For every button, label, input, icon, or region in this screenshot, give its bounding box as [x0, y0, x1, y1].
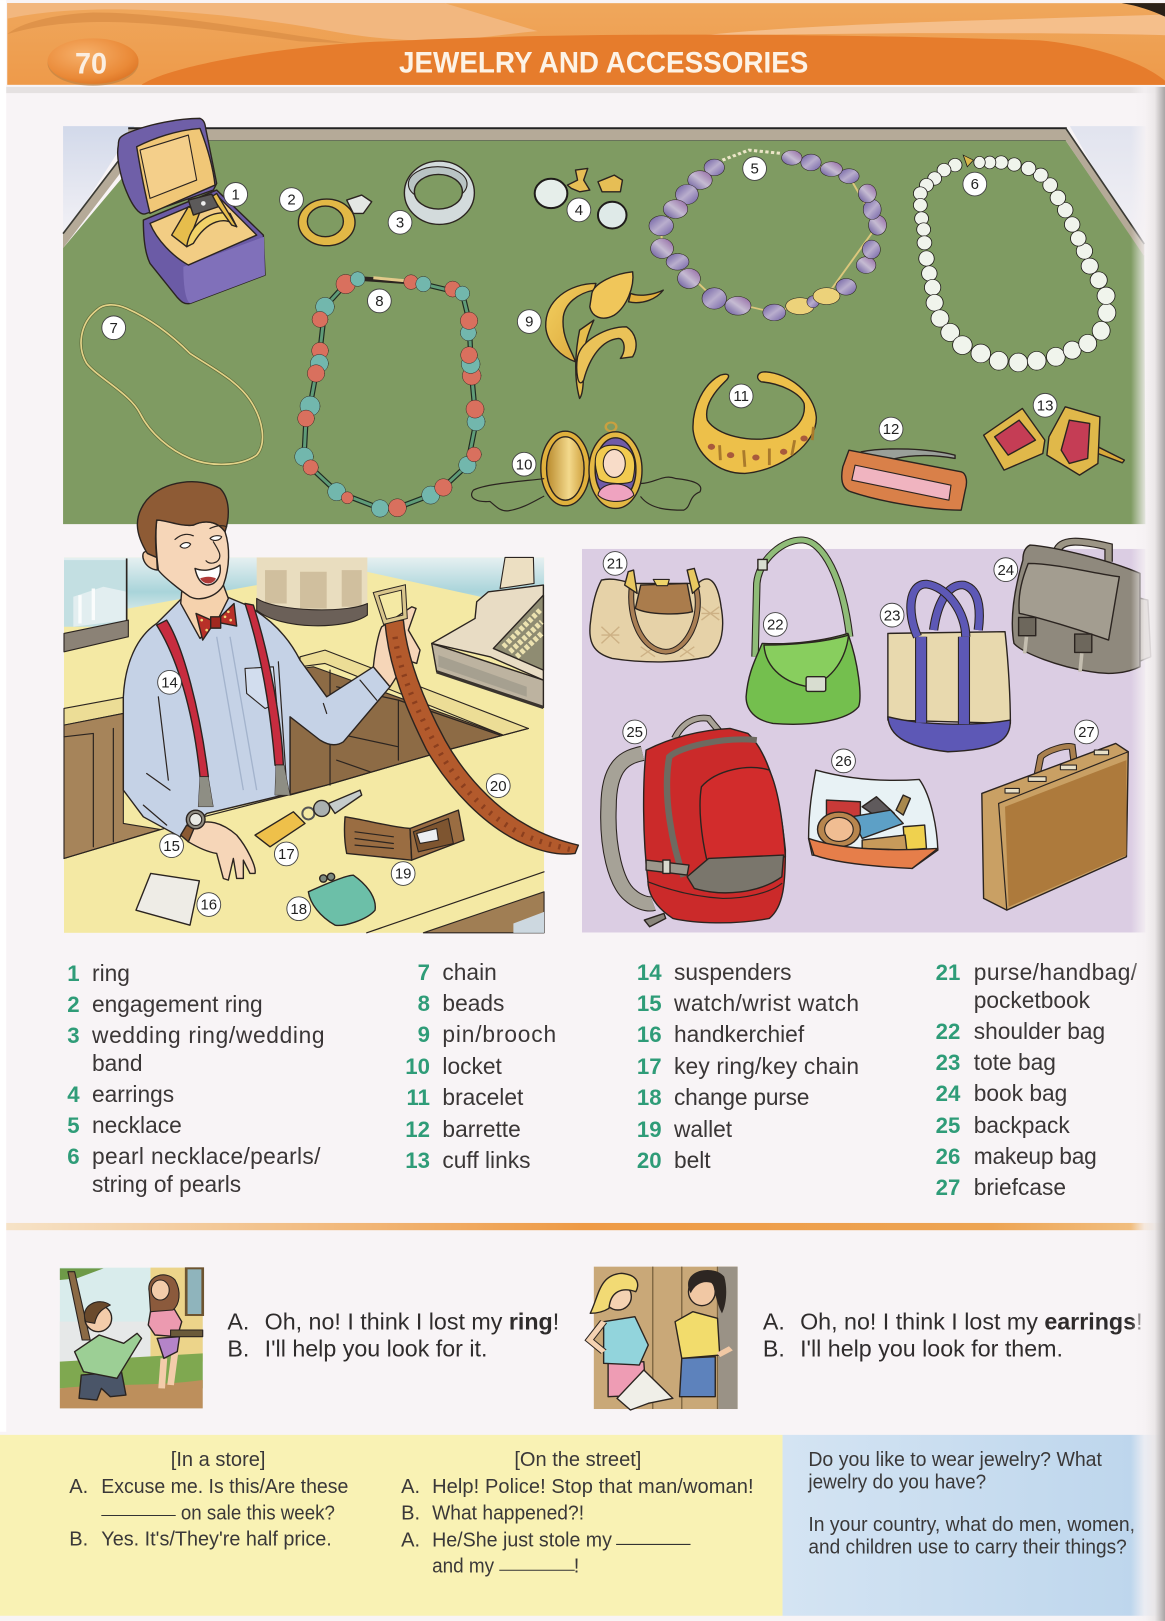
- dialogue 1: [227, 1308, 559, 1361]
- vocabulary column 4: [936, 959, 1138, 1200]
- head: [156, 520, 229, 599]
- vocabulary column 4: backpack: [974, 1112, 1070, 1138]
- number labels on illustrations: 17: [278, 846, 295, 863]
- panel: store counter scene: [64, 557, 544, 933]
- vocabulary column 3: key ring/key chain: [674, 1053, 859, 1079]
- left jewelry items: [81, 118, 485, 517]
- number labels on illustrations: 22: [767, 617, 784, 634]
- number labels on illustrations: 23: [884, 607, 900, 624]
- vocabulary column 4: 22: [936, 1019, 960, 1044]
- in a store dialogue: A.: [69, 1476, 88, 1498]
- raised hand: [373, 607, 420, 687]
- item: pearl necklace: [913, 155, 1116, 372]
- key ring: [255, 790, 362, 847]
- number labels on illustrations: 24: [997, 562, 1014, 579]
- number labels on illustrations: 11: [733, 388, 749, 405]
- vocabulary column 3: [637, 959, 859, 1173]
- cash register: [432, 557, 543, 707]
- vocabulary column 1: wedding ring/wedding: [91, 1022, 325, 1048]
- on the street dialogue: and my: [432, 1555, 494, 1577]
- background wall: [64, 557, 544, 620]
- number labels on illustrations: 9: [525, 314, 533, 331]
- number labels on illustrations: 26: [835, 753, 852, 770]
- counter opening cabinets: [290, 667, 503, 795]
- item: barrette: [842, 449, 966, 510]
- vocabulary column 2: 8: [418, 991, 430, 1016]
- face details: [175, 526, 227, 585]
- vocabulary column 1: earrings: [92, 1081, 174, 1107]
- item: locket cord left: [472, 479, 544, 511]
- vocabulary column 2: 12: [405, 1117, 430, 1142]
- pillar: [257, 557, 367, 626]
- vocabulary column 3: belt: [674, 1147, 711, 1173]
- panel: bags: [582, 540, 1151, 932]
- vocabulary column 1: engagement ring: [92, 991, 263, 1017]
- wrist watch: [181, 810, 205, 842]
- item: chain: [81, 305, 263, 464]
- item: purse: [590, 568, 723, 662]
- in a store dialogue: Yes. It's/They're half price.: [101, 1528, 332, 1550]
- panel: jewelry display case: [63, 118, 1145, 524]
- front counter corner: [367, 872, 544, 933]
- vocabulary column 2: 9: [418, 1022, 430, 1047]
- page number badge: [48, 38, 139, 86]
- dialogue 1: B.: [227, 1335, 249, 1361]
- vocabulary column 3: 14: [637, 960, 662, 985]
- vocabulary column 3: 18: [637, 1085, 662, 1110]
- on the street dialogue: Help! Police! Stop that man/woman!: [432, 1476, 754, 1498]
- hair: [137, 482, 228, 557]
- right jewelry items: [535, 150, 1124, 510]
- on the street dialogue: B.: [401, 1503, 420, 1525]
- on the street dialogue: He/She just stole my: [432, 1530, 612, 1552]
- left cabinets: [64, 713, 160, 858]
- illustration: two girls at lockers: [589, 1267, 738, 1410]
- panel: discussion questions blue band: Do you like to wear jewelry? What: [808, 1449, 1102, 1471]
- dialogue 2: Oh, no! I think I lost my earrings!: [800, 1308, 1143, 1334]
- on the street dialogue: [401, 1449, 754, 1577]
- vocabulary column 2: pin/brooch: [442, 1021, 556, 1047]
- number labels on illustrations: 13: [1037, 397, 1053, 414]
- vocabulary column 1: string of pearls: [92, 1171, 241, 1197]
- vocabulary column 3: handkerchief: [674, 1021, 805, 1047]
- number labels on illustrations: 10: [516, 456, 532, 473]
- number labels on illustrations: 2: [287, 192, 296, 209]
- page edge and spine shading: [1131, 87, 1165, 1621]
- vocabulary column 3: 20: [637, 1148, 662, 1173]
- item: locket: [541, 422, 701, 510]
- vocabulary column 3: 19: [637, 1117, 662, 1142]
- left page margin: [0, 0, 6, 1432]
- number labels on illustrations: 15: [163, 838, 180, 855]
- bow tie: [196, 603, 237, 640]
- on the street dialogue: !: [574, 1555, 579, 1577]
- dialogue 2: [763, 1308, 1143, 1361]
- counter rim: [300, 650, 528, 735]
- number labels on illustrations: 1: [232, 187, 240, 204]
- illustration: boy and girl in garden: [60, 1268, 203, 1408]
- item: ring box: [118, 118, 265, 304]
- vocabulary column 4: 26: [936, 1144, 960, 1169]
- item: bracelet: [693, 372, 816, 473]
- vocabulary column 2: beads: [442, 990, 504, 1016]
- man with belt: [123, 482, 578, 925]
- item: beads necklace: [295, 272, 485, 517]
- item: book bag: [1012, 542, 1151, 673]
- number labels on illustrations: 6: [971, 176, 979, 193]
- number labels on illustrations: 8: [375, 293, 384, 310]
- number labels on illustrations: 20: [490, 778, 507, 795]
- vocabulary column 4: 23: [936, 1050, 960, 1075]
- item: purple necklace: [649, 150, 886, 321]
- wallet: [344, 810, 464, 860]
- neck: [181, 585, 228, 638]
- header band: [0, 3, 1165, 93]
- on the street dialogue: [On the street]: [514, 1449, 641, 1471]
- item: backpack: [608, 718, 785, 927]
- number labels on illustrations: [102, 157, 1098, 921]
- title: JEWELRY AND ACCESSORIES: [399, 46, 808, 79]
- on the street dialogue: What happened?!: [432, 1503, 584, 1525]
- vocabulary column 1: [67, 960, 325, 1197]
- vocabulary column 4: book bag: [974, 1080, 1067, 1106]
- vocabulary column 1: 3: [67, 1023, 80, 1048]
- vocabulary column 4: 24: [936, 1081, 961, 1106]
- vocabulary column 4: 21: [936, 960, 960, 985]
- number labels on illustrations: 5: [750, 161, 759, 178]
- vocabulary column 2: chain: [442, 959, 497, 985]
- vocabulary column 2: 11: [407, 1085, 430, 1110]
- item: shoulder bag: [746, 540, 860, 724]
- number labels on illustrations: 7: [110, 320, 118, 337]
- vocabulary column 1: 5: [67, 1113, 80, 1138]
- counter hand: [188, 822, 255, 880]
- shirt: [123, 597, 390, 837]
- dialogue 2: A.: [763, 1308, 785, 1334]
- item: briefcase: [982, 743, 1128, 910]
- vocabulary column 4: tote bag: [974, 1049, 1056, 1075]
- panel: conversation yellow band: [0, 1435, 783, 1616]
- vocabulary column 3: 16: [637, 1022, 662, 1047]
- vocabulary column 4: shoulder bag: [974, 1018, 1105, 1044]
- number labels on illustrations: 14: [161, 674, 178, 691]
- in a store dialogue: on sale this week?: [181, 1503, 335, 1525]
- vocabulary column 4: makeup bag: [974, 1143, 1097, 1169]
- on the street dialogue: A.: [401, 1476, 420, 1498]
- vocabulary column 2: bracelet: [442, 1084, 524, 1110]
- vocabulary column 4: 27: [936, 1175, 960, 1200]
- number labels on illustrations: 21: [607, 556, 623, 573]
- item: earrings: [535, 168, 627, 228]
- dialogue 1: Oh, no! I think I lost my ring!: [265, 1308, 559, 1334]
- vocabulary column 2: cuff links: [442, 1147, 530, 1173]
- vocabulary column 3: wallet: [673, 1116, 733, 1142]
- belt: [376, 587, 578, 854]
- vocabulary column 1: pearl necklace/pearls/: [92, 1143, 321, 1169]
- vocabulary column 4: pocketbook: [974, 987, 1091, 1013]
- vocabulary column 1: 4: [67, 1082, 80, 1107]
- item: makeup bag: [809, 770, 938, 868]
- vocabulary column 1: 2: [67, 992, 80, 1017]
- panel: discussion questions blue band: In your country, what do men, women,: [808, 1514, 1135, 1536]
- handkerchief: [136, 873, 199, 925]
- vocabulary column 1: ring: [92, 960, 130, 986]
- on the street dialogue: A.: [401, 1530, 420, 1552]
- glass display case: [64, 558, 128, 652]
- item: cuff links: [984, 407, 1124, 475]
- vocabulary column 2: locket: [442, 1053, 503, 1079]
- number labels on illustrations: 16: [200, 897, 217, 914]
- dialogue 2: B.: [763, 1335, 785, 1361]
- left suspender: [157, 620, 208, 777]
- page number badge: 70: [75, 47, 107, 80]
- number labels on illustrations: 18: [290, 901, 307, 918]
- item: wedding band: [404, 161, 474, 224]
- in a store dialogue: [In a store]: [171, 1449, 265, 1471]
- vocabulary column 2: 10: [405, 1054, 430, 1079]
- vocabulary column 4: 25: [936, 1113, 960, 1138]
- dialogue 1: A.: [227, 1308, 249, 1334]
- vocabulary column 1: band: [92, 1050, 143, 1076]
- right suspender: [245, 603, 283, 765]
- vocabulary column 3: 17: [637, 1054, 662, 1079]
- item: tote bag: [888, 584, 1010, 752]
- vocabulary column 2: barrette: [442, 1116, 521, 1142]
- panel: discussion questions blue band: [783, 1435, 1165, 1616]
- suspender clips: [198, 765, 290, 807]
- vocabulary column 1: 1: [67, 961, 80, 986]
- change purse: [308, 873, 375, 925]
- left counter edge: [64, 697, 123, 725]
- vocabulary column 3: change purse: [674, 1084, 809, 1110]
- vocabulary column 4: briefcase: [974, 1174, 1066, 1200]
- in a store dialogue: B.: [69, 1528, 88, 1550]
- vocabulary column 3: watch/wrist watch: [673, 990, 859, 1016]
- vocabulary column 3: 15: [637, 991, 662, 1016]
- panel: discussion questions blue band: and children use to carry their things?: [808, 1537, 1127, 1559]
- vocabulary column 4: purse/handbag/: [974, 959, 1138, 985]
- number labels on illustrations: 12: [883, 421, 899, 438]
- number labels on illustrations: 27: [1078, 724, 1095, 741]
- orange divider: [2, 1223, 1165, 1230]
- dialogue 1: I'll help you look for it.: [265, 1335, 487, 1361]
- number labels on illustrations: 3: [396, 214, 404, 231]
- number labels on illustrations: 4: [575, 202, 583, 219]
- panel: discussion questions blue band: jewelry do you have?: [807, 1472, 986, 1494]
- shirt details: [143, 637, 377, 825]
- dialogue 2: I'll help you look for them.: [800, 1335, 1063, 1361]
- ear: [143, 551, 157, 570]
- in a store dialogue: Excuse me. Is this/Are these: [101, 1476, 348, 1498]
- item: brooch pin: [546, 272, 663, 398]
- vocabulary column 2: 7: [418, 960, 430, 985]
- front counter edge: [64, 728, 528, 858]
- vocabulary column 1: necklace: [92, 1112, 182, 1138]
- item: engagement ring: [298, 195, 372, 246]
- in a store dialogue: [69, 1449, 348, 1550]
- vocabulary column 2: 13: [405, 1148, 430, 1173]
- vocabulary column 3: suspenders: [674, 959, 792, 985]
- number labels on illustrations: 25: [626, 724, 643, 741]
- vocabulary column 2: [405, 959, 556, 1173]
- number labels on illustrations: 19: [395, 866, 411, 883]
- vocabulary column 1: 6: [67, 1144, 80, 1169]
